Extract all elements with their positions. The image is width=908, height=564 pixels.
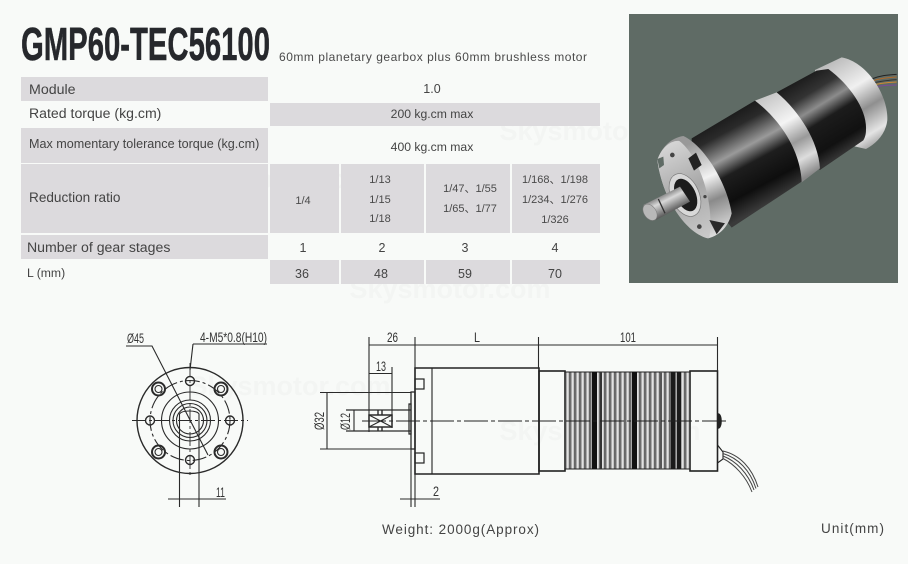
row: gear stages: 2	[379, 241, 386, 255]
watermarks: Skysmotor.com	[499, 116, 701, 146]
row: max momentary torque	[21, 128, 473, 163]
front flange rim	[657, 136, 732, 238]
row: gear stages	[21, 235, 559, 259]
row: reduction ratio: 1/4	[295, 195, 311, 207]
specification table	[21, 77, 600, 284]
row: gear stages: Number of gear stages	[27, 239, 170, 255]
finned motor body	[565, 372, 690, 469]
flange face	[657, 141, 710, 238]
label: 101: 101	[620, 330, 636, 345]
label: diameter 12: Ø12	[338, 413, 353, 430]
unit note: Unit(mm)	[821, 521, 884, 536]
front view drawing	[126, 330, 267, 507]
row: length: L (mm)	[27, 266, 65, 280]
row: max momentary torque: 400 kg.cm max	[391, 140, 473, 154]
subtitle: 60mm planetary gearbox plus 60mm brushless motor	[279, 50, 587, 64]
row: module: Module	[29, 82, 76, 98]
mounting holes	[146, 376, 234, 464]
label: diameter 32: Ø32	[312, 412, 327, 430]
row: gear stages: 4	[552, 241, 559, 255]
wires	[723, 451, 758, 492]
label: diameter 45: Ø45	[127, 331, 144, 346]
output shaft	[643, 187, 690, 220]
label: 26: 26	[387, 330, 398, 345]
row: reduction ratio	[21, 164, 600, 233]
row: length: 36	[295, 267, 309, 281]
row: max momentary torque: Max momentary tolerance torque (kg.cm)	[29, 137, 259, 151]
gearbox outline	[409, 368, 539, 474]
row: rated torque: Rated torque (kg.cm)	[29, 105, 161, 121]
row: gear stages: 3	[462, 241, 469, 255]
row: length: 70	[548, 267, 562, 281]
watermarks: Skysmotor.com	[499, 416, 701, 446]
output shaft	[346, 410, 411, 431]
row: reduction ratio: 1/18	[369, 213, 391, 225]
icon: motor	[640, 57, 897, 238]
row: reduction ratio: 1/168、1/198	[522, 174, 588, 186]
row: length: 59	[458, 267, 472, 281]
title: GMP60-TEC56100	[21, 18, 270, 70]
rear cap	[815, 57, 887, 149]
row: length: 48	[374, 267, 388, 281]
row: rated torque: 200 kg.cm max	[391, 107, 473, 121]
row: reduction ratio: 1/13	[369, 174, 391, 186]
watermarks: Skysmotor.com	[189, 371, 391, 401]
label: L: L	[474, 330, 480, 345]
row: module: 1.0	[423, 82, 441, 96]
motor body	[777, 69, 866, 170]
dimension lines	[320, 337, 718, 507]
row: length	[27, 260, 600, 284]
label: 11: 11	[216, 485, 225, 500]
motor photo panel	[629, 14, 898, 283]
label: 2: 2	[433, 484, 439, 499]
dimension lines	[126, 344, 267, 507]
motor end caps	[539, 371, 723, 471]
row: reduction ratio: 1/234、1/276	[522, 194, 588, 206]
side view drawing	[312, 330, 758, 507]
row: rated torque	[29, 103, 600, 126]
row: reduction ratio: Reduction ratio	[29, 190, 120, 205]
watermarks	[169, 116, 701, 446]
centre line	[362, 420, 728, 422]
label: 13: 13	[376, 359, 386, 374]
weight note: Weight: 2000g(Approx)	[382, 522, 539, 537]
row: module	[21, 77, 441, 101]
row: reduction ratio: 1/47、1/55	[443, 183, 497, 195]
watermarks: Skysmotor.com	[169, 164, 371, 194]
row: gear stages: 1	[300, 241, 307, 255]
middle ring	[755, 92, 820, 182]
row: reduction ratio: 1/65、1/77	[443, 203, 497, 215]
row: reduction ratio: 1/326	[541, 214, 569, 226]
gearbox body	[692, 101, 802, 228]
flange holes and notches	[670, 153, 675, 157]
wires	[872, 74, 897, 87]
bearing	[663, 169, 707, 221]
watermarks: Skysmotor.com	[349, 274, 551, 304]
row: reduction ratio: 1/15	[369, 194, 391, 206]
label: thread: 4-M5*0.8(H10)	[200, 330, 267, 345]
